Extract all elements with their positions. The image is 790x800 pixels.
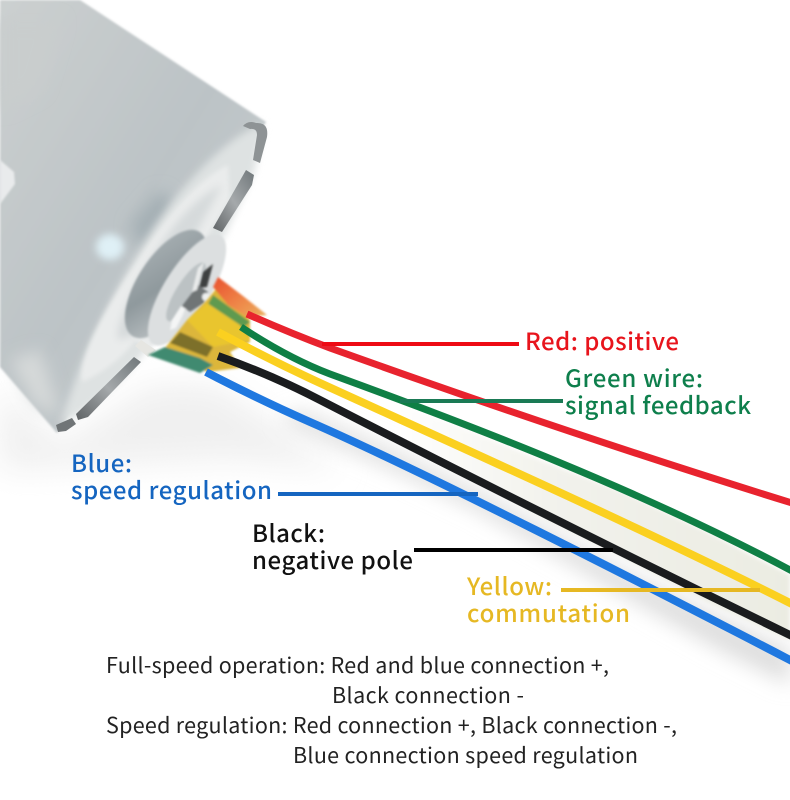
motor label sticker bbox=[0, 160, 15, 204]
label: green: Green wire: bbox=[565, 359, 703, 394]
tab bottom corner bbox=[56, 418, 76, 432]
label: green bbox=[565, 359, 751, 421]
label: yellow: Yellow: bbox=[466, 567, 552, 602]
label: blue: Blue: bbox=[71, 444, 132, 479]
yellow wire bbox=[218, 332, 790, 604]
label: blue bbox=[71, 444, 272, 506]
label: green: signal feedback bbox=[565, 386, 751, 421]
wires bbox=[206, 314, 790, 661]
red wire bbox=[247, 314, 790, 503]
cream reflection between wires bbox=[393, 405, 790, 640]
shaft boss face bbox=[134, 224, 240, 356]
wiring instructions: Black connection - bbox=[332, 679, 524, 710]
end cap face bbox=[60, 124, 264, 426]
tab top bbox=[243, 122, 267, 163]
table shadow under motor and wires bbox=[0, 385, 790, 685]
leader line: yellow bbox=[561, 588, 760, 592]
label: yellow bbox=[466, 567, 630, 629]
leader line: green bbox=[400, 399, 563, 403]
leader line: red bbox=[322, 342, 519, 346]
tab lower side bbox=[76, 357, 141, 420]
solder joint bbox=[148, 277, 267, 373]
motor bbox=[0, 0, 267, 433]
label: red: Red: positive bbox=[525, 322, 679, 357]
leader line: black bbox=[414, 548, 613, 552]
wiring instructions bbox=[106, 649, 677, 770]
label: black: negative pole bbox=[252, 541, 413, 576]
screw head bbox=[170, 262, 213, 330]
tab upper side bbox=[213, 170, 254, 232]
blue wire bbox=[206, 372, 790, 661]
label: blue: speed regulation bbox=[71, 471, 272, 506]
boss foot bbox=[135, 340, 156, 357]
shaft boss side bbox=[109, 217, 223, 351]
motor body bbox=[0, 0, 266, 433]
wiring instructions: Blue connection speed regulation bbox=[293, 739, 638, 770]
wiring instructions: Speed regulation: Red connection +, Black connection -, bbox=[106, 709, 677, 740]
label: black: Black: bbox=[252, 514, 325, 549]
label: black bbox=[252, 514, 413, 576]
leader line: blue bbox=[278, 492, 478, 496]
label: yellow: commutation bbox=[467, 594, 630, 629]
green wire bbox=[241, 327, 790, 571]
black wire bbox=[218, 356, 790, 636]
end cap highlight crescent bbox=[82, 165, 230, 382]
wiring instructions: Full-speed operation: Red and blue connection +, bbox=[106, 649, 609, 680]
